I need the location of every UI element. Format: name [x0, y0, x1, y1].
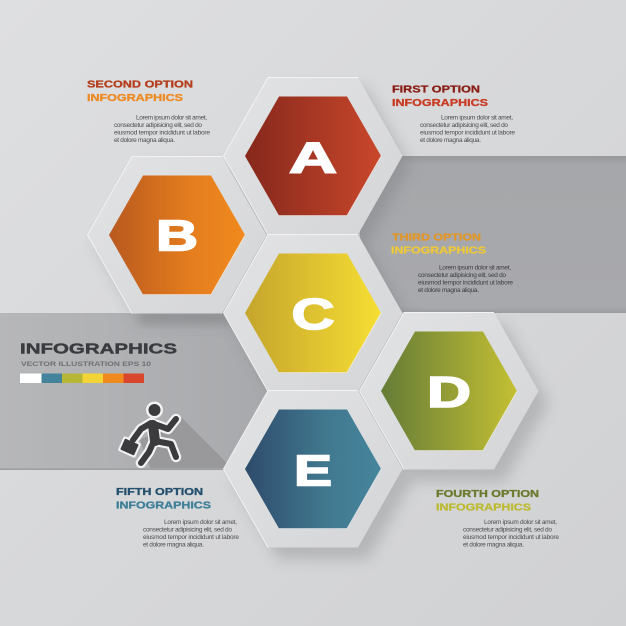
text block: third option: Lorem ipsum dolor sit amet, [439, 264, 511, 272]
hexagon D: D [427, 368, 471, 417]
text block: fourth option: FOURTH OPTION [436, 488, 539, 500]
text block: fifth option: et dolore magna aliqua. [143, 542, 204, 548]
hexagon E: E [294, 446, 332, 496]
text block: second option: Lorem ipsum dolor sit amet, [136, 114, 207, 122]
text block: fifth option: FIFTH OPTION [116, 486, 203, 498]
text block: second option [87, 78, 210, 144]
panel: right grey band [360, 156, 626, 313]
text block: fifth option [116, 486, 239, 548]
text block: second option: et dolore magna aliqua. [114, 137, 175, 144]
text block: fourth option: INFOGRAPHICS [436, 502, 531, 514]
hexagon E [224, 390, 402, 548]
title: VECTOR ILLUSTRATION EPS 10 [21, 361, 151, 368]
runner long shadow [140, 418, 227, 468]
text block: first option [392, 84, 515, 144]
text block: fourth option: et dolore magna aliqua. [463, 542, 524, 548]
text block: fifth option: Lorem ipsum dolor sit amet, [164, 519, 237, 526]
hexagon A: A [289, 134, 337, 182]
text block: first option: Lorem ipsum dolor sit amet, [441, 114, 513, 122]
hexagon C [224, 234, 402, 392]
text block: third option: INFOGRAPHICS [391, 244, 486, 256]
hexagon C: C [292, 290, 334, 339]
text block: second option: INFOGRAPHICS [87, 92, 183, 104]
text block: fourth option: Lorem ipsum dolor sit amet, [484, 519, 557, 526]
text block: first option: FIRST OPTION [392, 84, 480, 96]
text block: first option: consectetur adipisicing elit, sed do [420, 122, 508, 129]
hexagon B: B [156, 212, 198, 260]
colour swatches [20, 374, 144, 383]
text block: second option: eiusmod tempor incididunt ut labore [114, 130, 210, 136]
text block: fourth option: consectetur adipisicing elit, sed do [463, 526, 552, 534]
text block: third option: eiusmod tempor incididunt ut labore [418, 280, 513, 286]
hexagon A [224, 78, 402, 234]
text block: first option: INFOGRAPHICS [392, 97, 488, 109]
text block: second option: consectetur adipisicing elit, sed do [114, 122, 202, 129]
text block: third option: consectetur adipisicing elit, sed do [418, 272, 506, 279]
text block: first option: et dolore magna aliqua. [420, 137, 481, 144]
text block: second option: SECOND OPTION [87, 78, 193, 90]
text block: first option: eiusmod tempor incididunt ut labore [420, 130, 515, 136]
text block: third option: THIRD OPTION [392, 232, 481, 244]
hexagon D [360, 312, 538, 470]
panel: left grey band [0, 313, 270, 470]
text block: fourth option [436, 488, 559, 548]
text block: fifth option: INFOGRAPHICS [116, 500, 211, 512]
text block: fifth option: eiusmod tempor incididunt ut labore [143, 534, 239, 541]
hexagon shadows [96, 88, 548, 560]
hexagon B [88, 156, 266, 314]
title: INFOGRAPHICS [20, 342, 177, 358]
title [20, 342, 177, 368]
text block: third option: et dolore magna aliqua. [418, 287, 479, 294]
icon: running businessman [120, 402, 176, 463]
text block: fifth option: consectetur adipisicing elit, sed do [143, 526, 232, 534]
text block: third option [391, 232, 513, 294]
text block: fourth option: eiusmod tempor incididunt ut labore [463, 534, 559, 541]
